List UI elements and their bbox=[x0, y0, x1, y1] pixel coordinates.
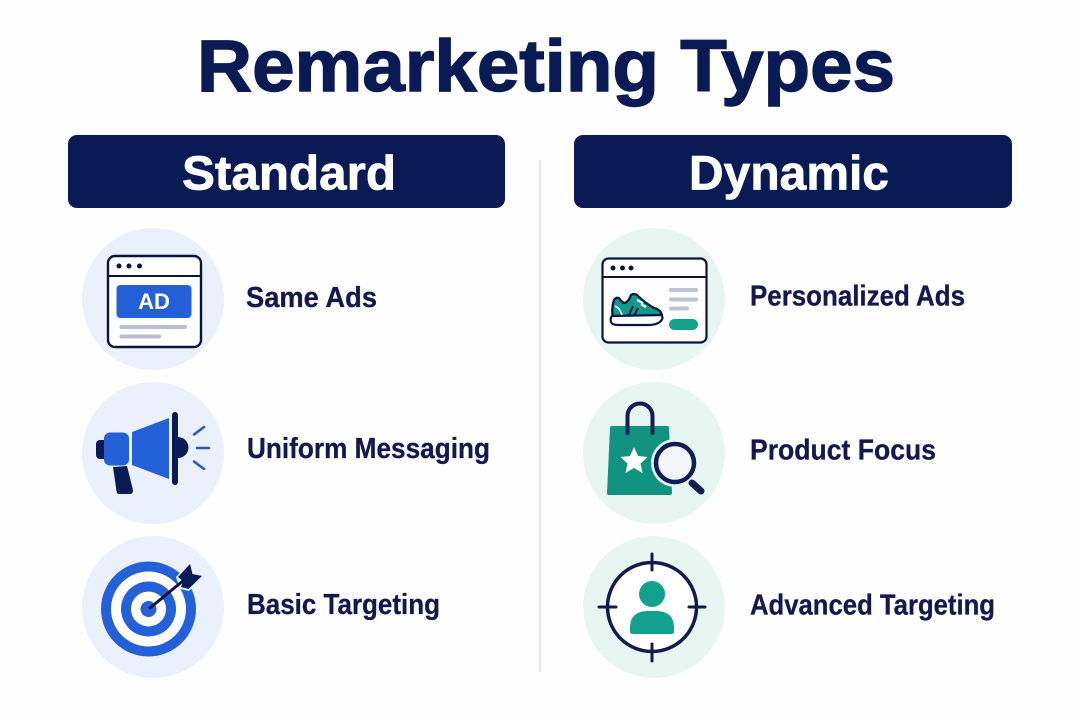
icon: shoe ad window bbox=[583, 228, 725, 370]
label: same ads: Same Ads bbox=[246, 282, 377, 314]
icon: megaphone bbox=[82, 382, 224, 524]
heading: standard bbox=[68, 135, 505, 208]
icon: shopping bag with magnifier bbox=[583, 382, 725, 524]
heading: dynamic bbox=[574, 135, 1012, 208]
heading: standard: Standard bbox=[182, 148, 396, 200]
label: advanced targeting: Advanced Targeting bbox=[750, 590, 995, 622]
icon: ad window bbox=[82, 228, 224, 370]
panel: dynamic bbox=[574, 135, 1012, 678]
label: product focus: Product Focus bbox=[750, 434, 936, 466]
icon: target bbox=[82, 536, 224, 678]
title: Remarketing Types bbox=[197, 26, 895, 107]
icon: ad window: AD bbox=[138, 289, 170, 314]
label: personalized ads: Personalized Ads bbox=[750, 280, 965, 312]
icon: person in crosshair bbox=[583, 536, 725, 678]
panel: standard bbox=[68, 135, 505, 678]
heading: dynamic: Dynamic bbox=[689, 148, 889, 200]
label: basic targeting: Basic Targeting bbox=[247, 589, 440, 621]
label: uniform messaging: Uniform Messaging bbox=[247, 433, 490, 465]
